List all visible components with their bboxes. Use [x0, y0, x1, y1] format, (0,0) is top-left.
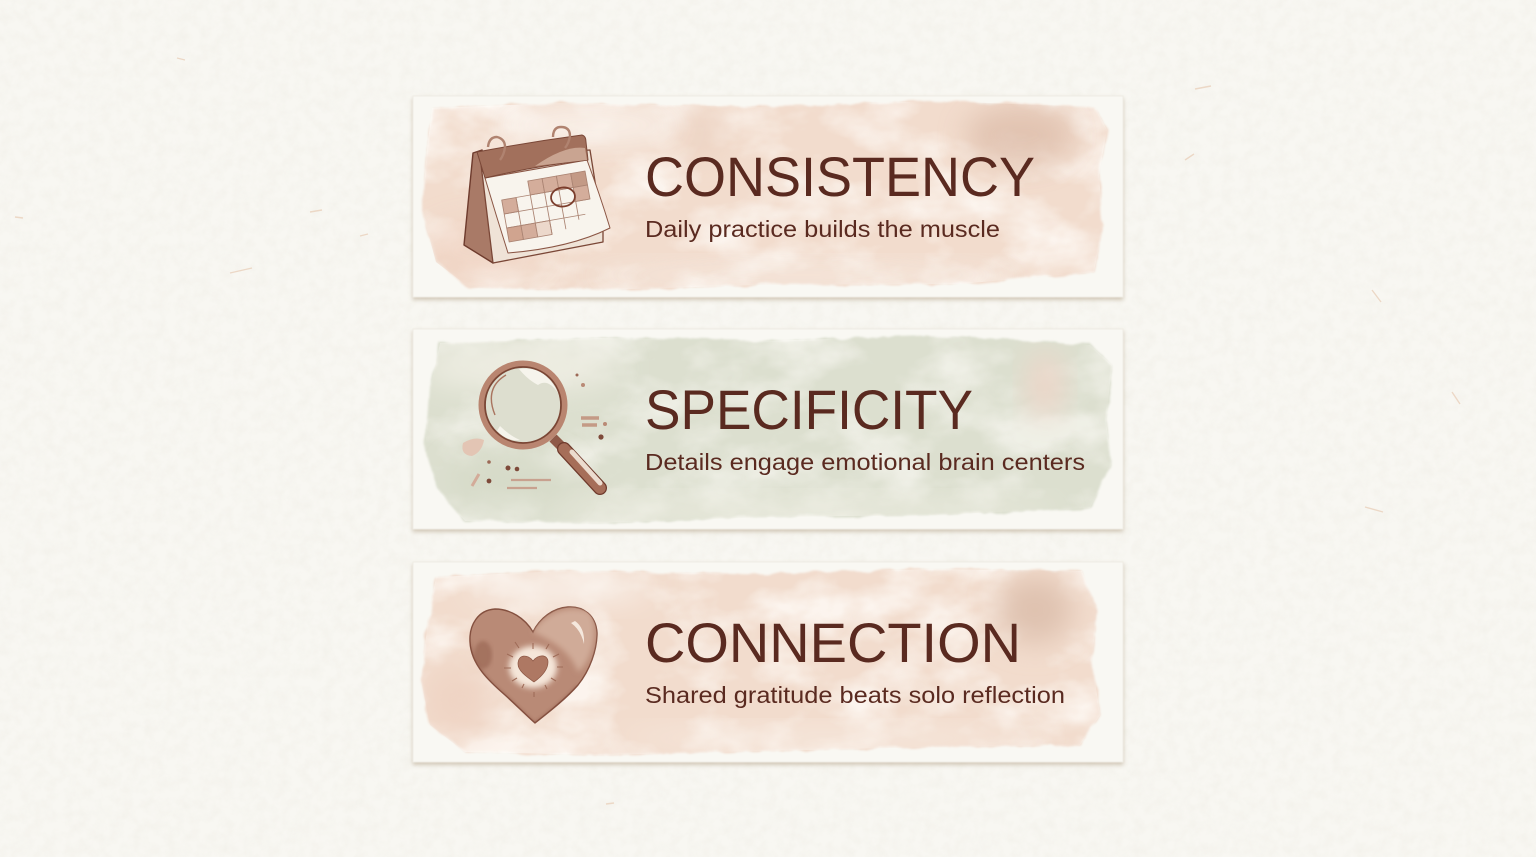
calendar grid	[499, 171, 595, 242]
panel: consistency	[413, 96, 1123, 297]
card: consistency	[413, 96, 1123, 297]
watercolor wash: connection	[413, 562, 1123, 762]
icon: calendar	[464, 127, 610, 263]
text: consistency: Daily practice builds the muscle	[645, 216, 1000, 242]
card: specificity	[413, 329, 1123, 529]
watercolor wash: specificity	[413, 329, 1123, 529]
specks and marks	[462, 374, 607, 488]
watercolor wash: consistency	[413, 96, 1123, 297]
heading: consistency: CONSISTENCY	[645, 145, 1035, 208]
icon: magnifying glass	[462, 364, 607, 488]
icon: heart	[466, 607, 597, 730]
text: specificity: Details engage emotional brain centers	[645, 449, 1085, 475]
heading: connection: CONNECTION	[645, 611, 1021, 674]
text: connection: Shared gratitude beats solo reflection	[645, 682, 1065, 708]
heading: specificity: SPECIFICITY	[645, 378, 973, 441]
panel: specificity	[413, 329, 1123, 529]
handle	[553, 438, 600, 488]
panel: connection	[413, 562, 1123, 762]
card: connection	[413, 562, 1123, 762]
